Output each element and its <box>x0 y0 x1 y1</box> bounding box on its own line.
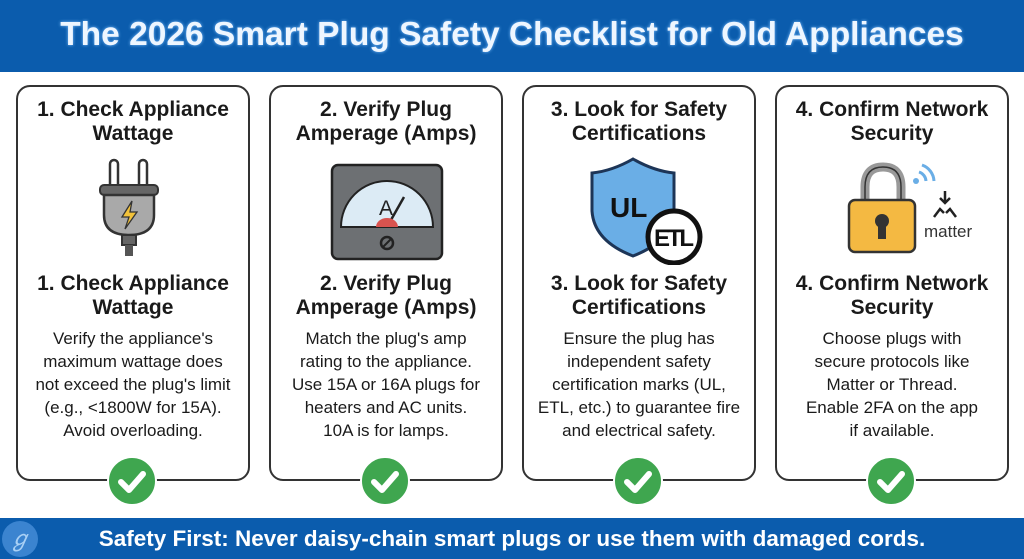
heading repeat <box>296 272 476 319</box>
heading: certifications: Certifications <box>572 122 706 145</box>
body text: secure protocols like <box>815 352 969 371</box>
body text: Use 15A or 16A plugs for <box>292 375 480 394</box>
heading: amperage: 2. Verify Plug <box>320 98 452 121</box>
icon: UL shield and ETL: ETL <box>654 225 694 252</box>
heading: amperage: Amperage (Amps) <box>296 122 476 145</box>
heading: wattage: 1. Check Appliance <box>37 98 229 121</box>
body text: rating to the appliance. <box>300 352 472 371</box>
panel: network security <box>775 85 1009 481</box>
heading repeat: 2. Verify Plug <box>320 272 452 295</box>
logo icon: ℊ <box>9 526 31 551</box>
body text <box>292 329 480 440</box>
check icon 3 <box>613 456 663 506</box>
check icon 1 <box>107 456 157 506</box>
heading: network: Security <box>851 122 933 145</box>
body text: heaters and AC units. <box>305 398 467 417</box>
icon: ammeter <box>330 164 444 260</box>
heading repeat <box>551 272 727 319</box>
icon: padlock with wifi and matter <box>848 162 973 254</box>
body text: independent safety <box>567 352 711 371</box>
body text: Match the plug's amp <box>305 329 467 348</box>
title: The 2026 Smart Plug Safety Checklist for Old Appliances <box>60 16 964 53</box>
body text: maximum wattage does <box>43 352 223 371</box>
heading: wattage: Wattage <box>93 122 173 145</box>
icon: padlock with wifi and matter: matter <box>924 222 973 241</box>
check icon 4 <box>866 456 916 506</box>
heading: certifications <box>551 98 727 145</box>
panel: wattage <box>16 85 250 481</box>
body text: Avoid overloading. <box>63 421 203 440</box>
heading repeat: Amperage (Amps) <box>296 296 476 319</box>
icon: UL shield and ETL: UL <box>610 192 647 223</box>
body text: 10A is for lamps. <box>323 421 449 440</box>
icon: plug <box>99 158 159 256</box>
logo icon <box>2 521 38 557</box>
icon: ammeter: A <box>379 197 393 220</box>
heading: network: 4. Confirm Network <box>796 98 988 121</box>
body text: Choose plugs with <box>823 329 961 348</box>
heading: certifications: 3. Look for Safety <box>551 98 727 121</box>
icon: UL shield and ETL <box>590 157 702 265</box>
panel: certifications <box>522 85 756 481</box>
footer banner <box>0 518 1024 559</box>
body text: and electrical safety. <box>562 421 716 440</box>
heading repeat: 3. Look for Safety <box>551 272 727 295</box>
panel: amperage <box>269 85 503 481</box>
check icon 2 <box>360 456 410 506</box>
footer banner: Safety First: Never daisy-chain smart plugs or use them with damaged cords. <box>99 526 925 551</box>
heading repeat <box>796 272 988 319</box>
body text: Ensure the plug has <box>563 329 715 348</box>
title <box>0 0 1024 72</box>
body text: ETL, etc.) to guarantee fire <box>538 398 740 417</box>
body text <box>806 329 978 440</box>
body text: not exceed the plug's limit <box>35 375 231 394</box>
heading repeat: Security <box>851 296 933 319</box>
heading: amperage <box>296 98 476 145</box>
body text: Verify the appliance's <box>53 329 213 348</box>
body text: certification marks (UL, <box>552 375 726 394</box>
body text: Matter or Thread. <box>826 375 958 394</box>
body text <box>538 329 740 440</box>
body text: (e.g., <1800W for 15A). <box>44 398 222 417</box>
body text <box>35 329 231 440</box>
body text: if available. <box>849 421 935 440</box>
heading repeat: 4. Confirm Network <box>796 272 988 295</box>
heading repeat <box>37 272 229 319</box>
heading repeat: 1. Check Appliance <box>37 272 229 295</box>
heading: network <box>796 98 988 145</box>
heading repeat: Certifications <box>572 296 706 319</box>
body text: Enable 2FA on the app <box>806 398 978 417</box>
heading repeat: Wattage <box>93 296 173 319</box>
heading: wattage <box>37 98 229 145</box>
